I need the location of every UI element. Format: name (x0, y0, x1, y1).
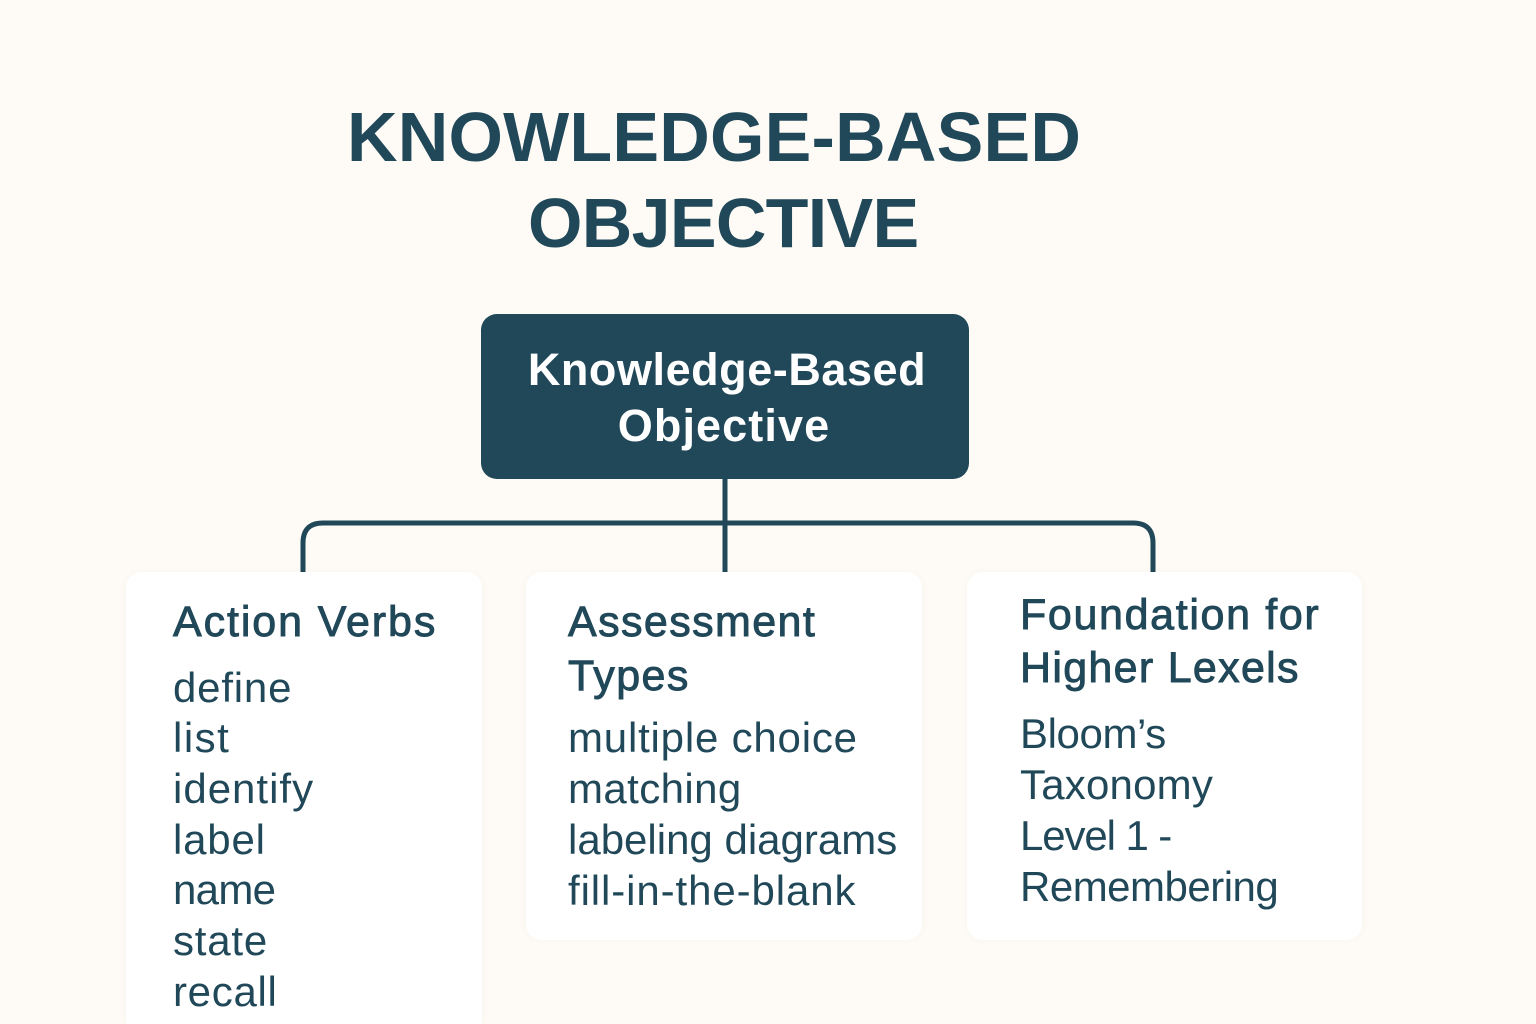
list: assessment types: fill-in-the-blank (568, 867, 856, 914)
title (347, 98, 1081, 262)
heading: Foundation for Higher Lexels: Higher Lexels (1020, 644, 1300, 692)
root box: Knowledge-Based Objective (481, 314, 969, 479)
title: KNOWLEDGE-BASED (347, 98, 1081, 176)
list: assessment types: matching (568, 765, 742, 812)
text: Bloom's Taxonomy Level 1: Bloom’s (1020, 710, 1166, 757)
list: action verbs: state (173, 917, 268, 964)
title: OBJECTIVE (528, 184, 918, 262)
list: action verbs (173, 664, 314, 1015)
text: Bloom's Taxonomy Level 1: Taxonomy (1020, 761, 1213, 808)
list: action verbs: define (173, 664, 292, 711)
root box: Knowledge-Based Objective: Knowledge-Based (528, 344, 926, 395)
heading: Assessment Types (568, 598, 816, 700)
text: Bloom's Taxonomy Level 1: Level 1 - (1020, 812, 1171, 859)
heading: Foundation for Higher Lexels (1020, 591, 1320, 692)
list: action verbs: identify (173, 765, 314, 812)
list: action verbs: label (173, 816, 266, 863)
list: assessment types: multiple choice (568, 714, 858, 761)
list: assessment types: labeling diagrams (568, 816, 897, 863)
panel: Foundation for Higher Levels (967, 572, 1362, 940)
text: Bloom's Taxonomy Level 1: Remembering (1020, 863, 1278, 910)
text: Bloom's Taxonomy Level 1 (1020, 710, 1278, 910)
heading: Assessment Types: Types (568, 652, 690, 700)
panel: Assessment Types (526, 572, 922, 940)
list: action verbs: name (173, 866, 275, 913)
heading: Assessment Types: Assessment (568, 598, 816, 646)
panel: Action Verbs (126, 572, 482, 1024)
heading: Foundation for Higher Lexels: Foundation for (1020, 591, 1320, 639)
list: action verbs: recall (173, 968, 278, 1015)
list: assessment types (568, 714, 897, 914)
root box: Knowledge-Based Objective: Objective (618, 400, 830, 451)
heading: Action Verbs: Action Verbs (173, 598, 437, 646)
list: action verbs: list (173, 714, 230, 761)
